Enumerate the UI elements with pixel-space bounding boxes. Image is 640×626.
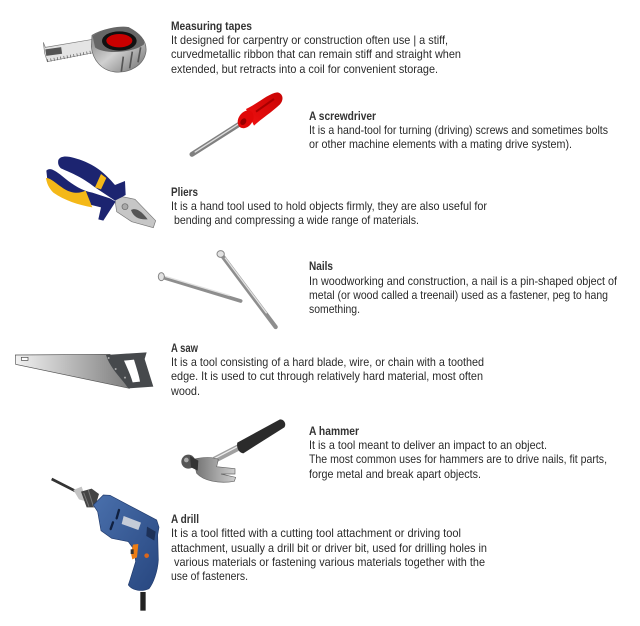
heading and text: drill bbox=[171, 512, 487, 583]
heading and text: saw: wood. bbox=[170, 384, 200, 398]
heading and text: drill: A drill bbox=[171, 512, 199, 526]
heading and text: hammer: It is a tool meant to deliver an impact to an object. bbox=[309, 438, 547, 452]
heading and text: pliers bbox=[171, 185, 487, 227]
heading and text: measuring tapes: curvedmetallic ribbon that can remain stiff and straight when bbox=[171, 47, 461, 61]
heading and text: measuring tapes: Measuring tapes bbox=[171, 19, 252, 33]
icon: saw bbox=[15, 352, 153, 388]
heading and text: measuring tapes: extended, but retracts into a coil for convenient storage. bbox=[171, 62, 438, 76]
heading and text: measuring tapes bbox=[171, 19, 461, 76]
icon: screwdriver bbox=[192, 92, 283, 154]
heading and text: drill: attachment, usually a drill bit or driver bit, used for drilling holes in bbox=[171, 541, 487, 555]
heading and text: saw: It is a tool consisting of a hard blade, wire, or chain with a toothed bbox=[171, 355, 484, 369]
heading and text: hammer: A hammer bbox=[309, 424, 359, 438]
heading and text: screwdriver: A screwdriver bbox=[309, 109, 376, 123]
heading and text: pliers: bending and compressing a wide range of materials. bbox=[174, 213, 419, 227]
heading and text: drill: use of fasteners. bbox=[171, 569, 248, 583]
heading and text: drill: various materials or fastening various materials together with the bbox=[174, 555, 485, 569]
heading and text: nails: Nails bbox=[309, 259, 333, 273]
icon: measuring tape bbox=[43, 27, 146, 72]
heading and text: screwdriver: or other machine elements with a mating drive system). bbox=[309, 137, 572, 151]
heading and text: measuring tapes: It designed for carpentry or construction often use | a stiff, bbox=[171, 33, 448, 47]
heading and text: nails bbox=[309, 259, 618, 316]
heading and text: screwdriver bbox=[309, 109, 608, 151]
heading and text: saw: edge. It is used to cut through relatively hard material, most often bbox=[171, 369, 483, 383]
heading and text: hammer: The most common uses for hammers are to drive nails, fit parts, bbox=[309, 452, 607, 466]
heading and text: nails: something. bbox=[309, 302, 360, 316]
heading and text: screwdriver: It is a hand-tool for turning (driving) screws and sometimes bolts bbox=[309, 123, 608, 137]
icon: hammer bbox=[181, 419, 285, 482]
icon: drill bbox=[52, 479, 159, 611]
heading and text: pliers: It is a hand tool used to hold objects firmly, they are also useful for bbox=[171, 199, 487, 213]
heading and text: saw: A saw bbox=[171, 341, 199, 355]
heading and text: saw bbox=[170, 341, 484, 398]
heading and text: drill: It is a tool fitted with a cutting tool attachment or driving tool bbox=[171, 526, 461, 540]
heading and text: hammer: forge metal and break apart objects. bbox=[309, 467, 481, 481]
icon: nails bbox=[158, 251, 276, 327]
heading and text: hammer bbox=[309, 424, 607, 481]
icon: pliers bbox=[46, 157, 156, 228]
heading and text: pliers: Pliers bbox=[171, 185, 198, 199]
